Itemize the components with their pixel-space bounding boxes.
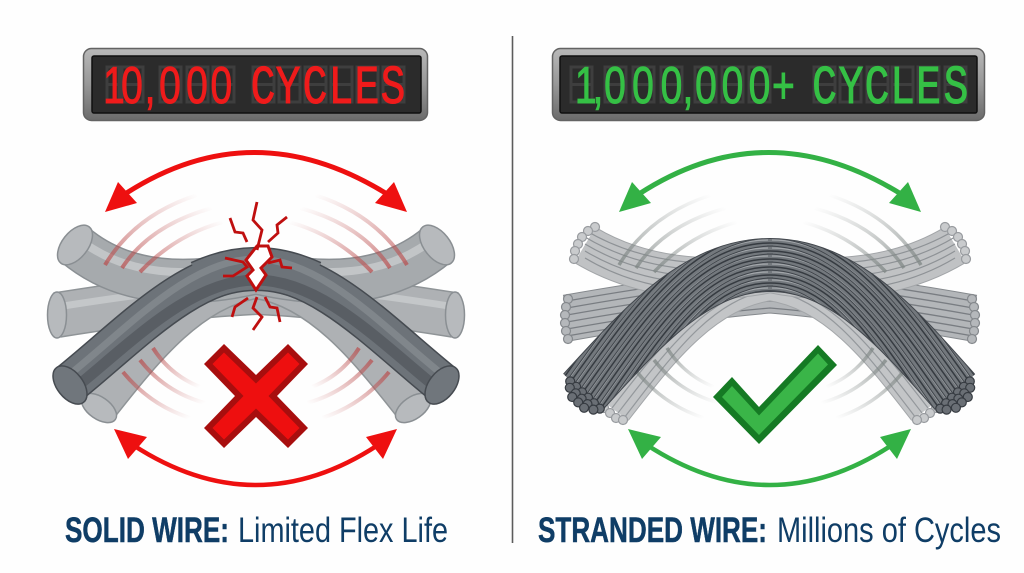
- caption: solid wire: SOLID WIRE:: [65, 511, 229, 550]
- motion ripple arcs: [105, 195, 407, 418]
- caption: stranded wire: [538, 511, 1001, 550]
- stranded wire bent: [563, 238, 976, 415]
- counter display: 1,000,000+ cycles: [552, 48, 984, 120]
- motion ripple arcs: [619, 195, 921, 418]
- crack: [223, 202, 292, 330]
- ghost stranded wire positions: [560, 222, 980, 424]
- top double arrow: [619, 152, 921, 212]
- panel: stranded wire: [538, 48, 1001, 550]
- ghost wire positions: [48, 219, 464, 428]
- panel: solid wire: [46, 48, 466, 550]
- icon: green check: [713, 345, 837, 444]
- caption: stranded wire: STRANDED WIRE:: [538, 511, 767, 550]
- top double arrow: [105, 152, 407, 212]
- caption: solid wire: Limited Flex Life: [238, 511, 448, 550]
- bottom double arrow: [114, 429, 397, 485]
- solid wire bent: [46, 259, 466, 410]
- counter display: 1,000,000+ cycles: 1,000,000+: [575, 55, 795, 114]
- icon: red X: [204, 344, 308, 448]
- bottom double arrow: [628, 429, 911, 485]
- counter display: 10,000 cycles: [84, 48, 428, 120]
- caption: solid wire: [65, 511, 448, 550]
- counter display: 10,000 cycles: CYCLES: [251, 58, 405, 120]
- divider line: [512, 36, 514, 543]
- counter display: 10,000 cycles: 10,000: [103, 55, 232, 114]
- counter display: 1,000,000+ cycles: CYCLES: [812, 58, 968, 120]
